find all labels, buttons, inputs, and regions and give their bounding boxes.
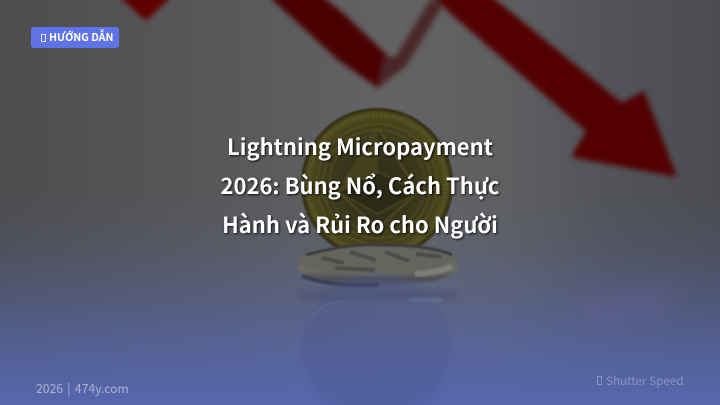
reflection of arrow on table	[565, 283, 680, 330]
image credit: Shutter Speed	[606, 372, 684, 389]
title: Hành và Rủi Ro cho Người	[222, 208, 498, 240]
footer: year and site: 2026 | 474y.com	[36, 379, 129, 397]
standing coin	[301, 108, 453, 260]
red chart line and arrowhead	[112, 0, 677, 177]
title	[221, 130, 500, 241]
category badge: HƯỚNG DẪN	[49, 30, 113, 45]
flat coin	[298, 244, 458, 286]
title: 2026: Bùng Nổ, Cách Thực	[221, 169, 499, 201]
category badge	[31, 27, 119, 48]
coin reflection	[298, 272, 458, 405]
title: Lightning Micropayment	[227, 130, 493, 162]
